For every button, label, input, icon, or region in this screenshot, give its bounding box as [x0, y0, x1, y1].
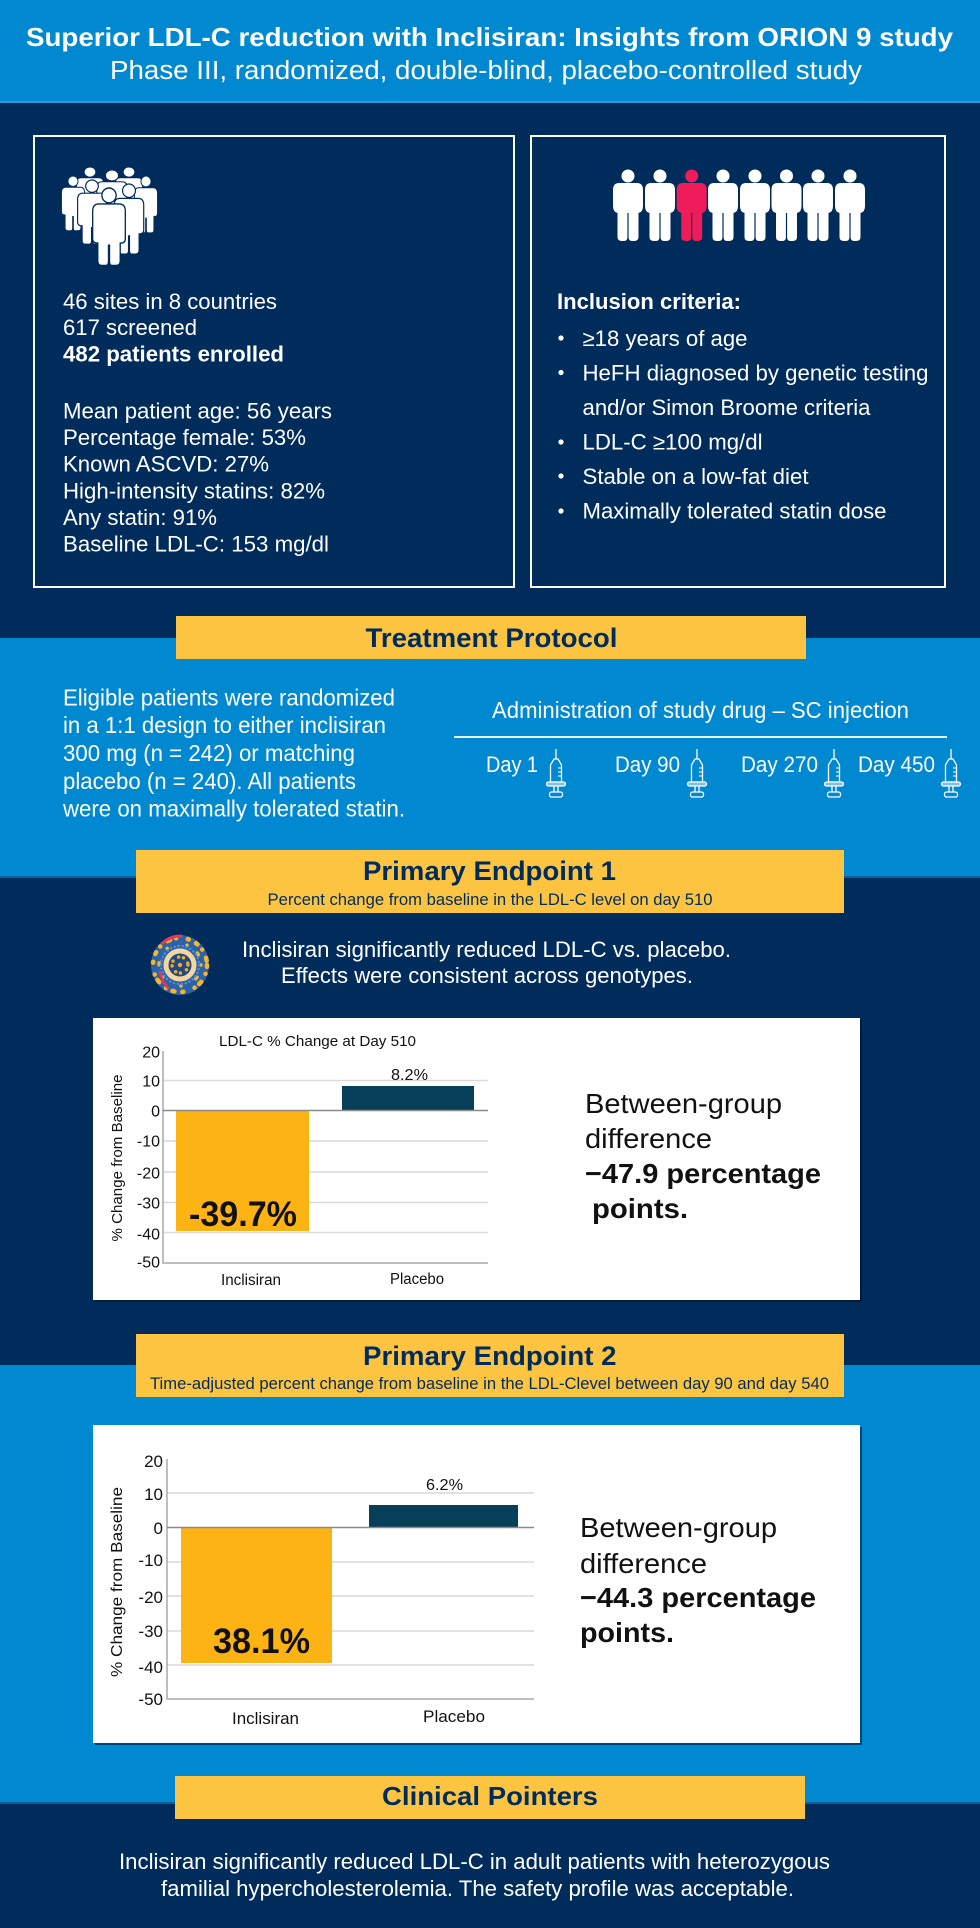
bar: placebo: 6.2%	[426, 1477, 463, 1494]
text: baseline characteristics	[63, 398, 332, 556]
text: inclusion criteria list: Stable on a low-fat diet	[582, 464, 808, 489]
text: between-group difference: −44.3 percentage	[580, 1582, 816, 1613]
text: enrollment	[63, 289, 284, 366]
heading: primary endpoint 1: Primary Endpoint 1	[363, 856, 616, 886]
y axis tick labels: -30	[137, 1196, 160, 1212]
text: clinical conclusion: familial hypercholesterolemia. The safety profile was acceptable.	[161, 1876, 794, 1901]
dose: day 270	[741, 749, 844, 797]
text: inclusion criteria list: Maximally tolerated statin dose	[582, 498, 886, 524]
dose: day 1	[486, 749, 566, 797]
x axis labels	[221, 1271, 444, 1289]
title: Superior LDL-C reduction with Inclisiran: Insights from ORION 9 study	[26, 22, 954, 52]
y axis tick labels: -40	[137, 1226, 160, 1244]
text: baseline characteristics: Known ASCVD: 27%	[63, 452, 269, 476]
panel: study population	[34, 136, 514, 587]
text: between-group difference	[585, 1088, 821, 1224]
bar: placebo: 8.2%	[391, 1067, 428, 1084]
text: clinical conclusion: Inclisiran significantly reduced LDL-C in adult patients with heterozygous	[119, 1849, 830, 1874]
heading: clinical pointers: Clinical Pointers	[382, 1781, 598, 1811]
bar chart: time-adjusted percent change	[109, 1452, 534, 1728]
panel: endpoint 2 results card	[93, 1425, 862, 1745]
text: inclusion criteria list: LDL-C ≥100 mg/dl	[582, 430, 762, 454]
y axis tick labels	[138, 1452, 163, 1709]
text: randomization design: Eligible patients were randomized	[63, 684, 395, 710]
text: enrollment: 617 screened	[63, 315, 197, 340]
title: Phase III, randomized, double-blind, placebo-controlled study	[110, 57, 862, 85]
text: inclusion criteria list: ≥18 years of age	[582, 326, 748, 351]
y axis tick labels: -10	[138, 1551, 163, 1570]
x axis labels	[232, 1707, 485, 1728]
text: inclusion criteria list: HeFH diagnosed by genetic testing	[582, 360, 928, 386]
text: baseline characteristics: High-intensity statins: 82%	[63, 478, 325, 504]
heading: primary endpoint 2	[136, 1334, 844, 1397]
panel: endpoint 1 results card	[93, 1018, 862, 1302]
text: between-group difference: difference	[585, 1123, 712, 1154]
heading: primary endpoint 1	[136, 850, 844, 913]
dose: day 90: Day 90	[615, 752, 680, 777]
x axis labels: Placebo	[390, 1271, 444, 1288]
text: enrollment: 46 sites in 8 countries	[63, 289, 277, 314]
heading: primary endpoint 2: Time-adjusted percent change from baseline in the LDL-Clevel between day 90 and day 540	[150, 1375, 829, 1393]
panel: administration schedule	[454, 697, 960, 797]
bar: inclisiran	[176, 1111, 309, 1234]
dose: day 90	[615, 749, 706, 797]
bar: inclisiran: -39.7%	[189, 1195, 297, 1234]
y axis tick labels: -40	[138, 1658, 163, 1677]
y axis tick labels: -50	[138, 1690, 163, 1709]
y axis tick labels: -50	[137, 1254, 160, 1272]
text: between-group difference	[580, 1512, 816, 1648]
text: between-group difference: Between-group	[585, 1088, 782, 1119]
dose: day 270: Day 270	[741, 752, 818, 777]
y axis tick labels: -10	[137, 1134, 160, 1150]
heading: treatment protocol	[176, 616, 806, 659]
bar: inclisiran: 38.1%	[213, 1622, 310, 1661]
bar: inclisiran	[181, 1527, 332, 1663]
dose: day 1: Day 1	[486, 752, 538, 777]
text: primary endpoint 1 finding: Inclisiran significantly reduced LDL-C vs. placebo.	[242, 937, 731, 962]
heading: primary endpoint 2: Primary Endpoint 2	[363, 1341, 616, 1371]
x axis labels: Inclisiran	[232, 1709, 299, 1728]
heading: primary endpoint 1: Percent change from baseline in the LDL-C level on day 510	[268, 891, 712, 909]
icon: row of eight people, one highlighted	[613, 170, 865, 241]
y axis tick labels: 10	[144, 1485, 163, 1504]
text: between-group difference: difference	[580, 1548, 707, 1579]
text: enrollment: 482 patients enrolled	[63, 342, 284, 366]
y axis tick labels: 10	[142, 1074, 160, 1090]
title	[26, 22, 954, 85]
y axis tick labels	[137, 1044, 160, 1272]
text: primary endpoint 1 finding: Effects were consistent across genotypes.	[281, 963, 693, 988]
text: inclusion criteria list	[558, 326, 928, 524]
text: between-group difference: points.	[580, 1617, 674, 1648]
heading: treatment protocol: Treatment Protocol	[366, 623, 618, 653]
bar: placebo	[369, 1477, 518, 1527]
icon: crowd of people	[61, 167, 158, 265]
y axis tick labels: 20	[144, 1452, 163, 1471]
text: randomization design: placebo (n = 240). All patients	[63, 768, 356, 794]
text: between-group difference: −47.9 percentage	[585, 1158, 821, 1189]
text: between-group difference: Between-group	[580, 1512, 777, 1543]
y axis tick labels: 0	[154, 1519, 163, 1538]
dose: day 450	[858, 749, 960, 797]
text: inclusion criteria heading: Inclusion criteria:	[557, 289, 741, 314]
y axis tick labels: -30	[138, 1622, 163, 1641]
text: primary endpoint 1 finding	[242, 937, 731, 988]
text: administration heading: Administration of study drug – SC injection	[492, 697, 909, 723]
icon: LDL particle	[151, 935, 209, 995]
text: randomization design: were on maximally tolerated statin.	[62, 796, 405, 822]
text: between-group difference: points.	[592, 1193, 688, 1224]
x axis labels: Inclisiran	[221, 1272, 281, 1289]
bar chart: LDL-C % change at day 510: LDL-C % Change at Day 510	[219, 1033, 416, 1050]
y axis title: % Change from Baseline	[109, 1074, 126, 1242]
text: inclusion criteria list: and/or Simon Broome criteria	[582, 395, 871, 420]
x axis labels: Placebo	[423, 1707, 485, 1726]
text: clinical conclusion	[119, 1849, 830, 1901]
text: randomization design: 300 mg (n = 242) or matching	[63, 740, 355, 766]
y axis tick labels: -20	[137, 1166, 160, 1182]
text: randomization design: in a 1:1 design to either inclisiran	[63, 712, 386, 738]
y axis title: % Change from Baseline	[109, 1487, 126, 1677]
y axis tick labels: 0	[151, 1104, 160, 1120]
text: baseline characteristics: Mean patient age: 56 years	[63, 398, 332, 424]
y axis tick labels: -20	[138, 1588, 163, 1607]
heading: clinical pointers	[175, 1776, 805, 1819]
bar: placebo	[342, 1067, 474, 1110]
text: randomization design	[62, 684, 405, 822]
panel: inclusion criteria	[531, 136, 945, 587]
bar chart: LDL-C % change at day 510	[109, 1033, 488, 1289]
y axis tick labels: 20	[142, 1044, 160, 1062]
text: baseline characteristics: Any statin: 91%	[63, 505, 217, 530]
text: baseline characteristics: Baseline LDL-C: 153 mg/dl	[63, 532, 329, 556]
text: baseline characteristics: Percentage female: 53%	[63, 425, 306, 450]
dose: day 450: Day 450	[858, 752, 935, 777]
